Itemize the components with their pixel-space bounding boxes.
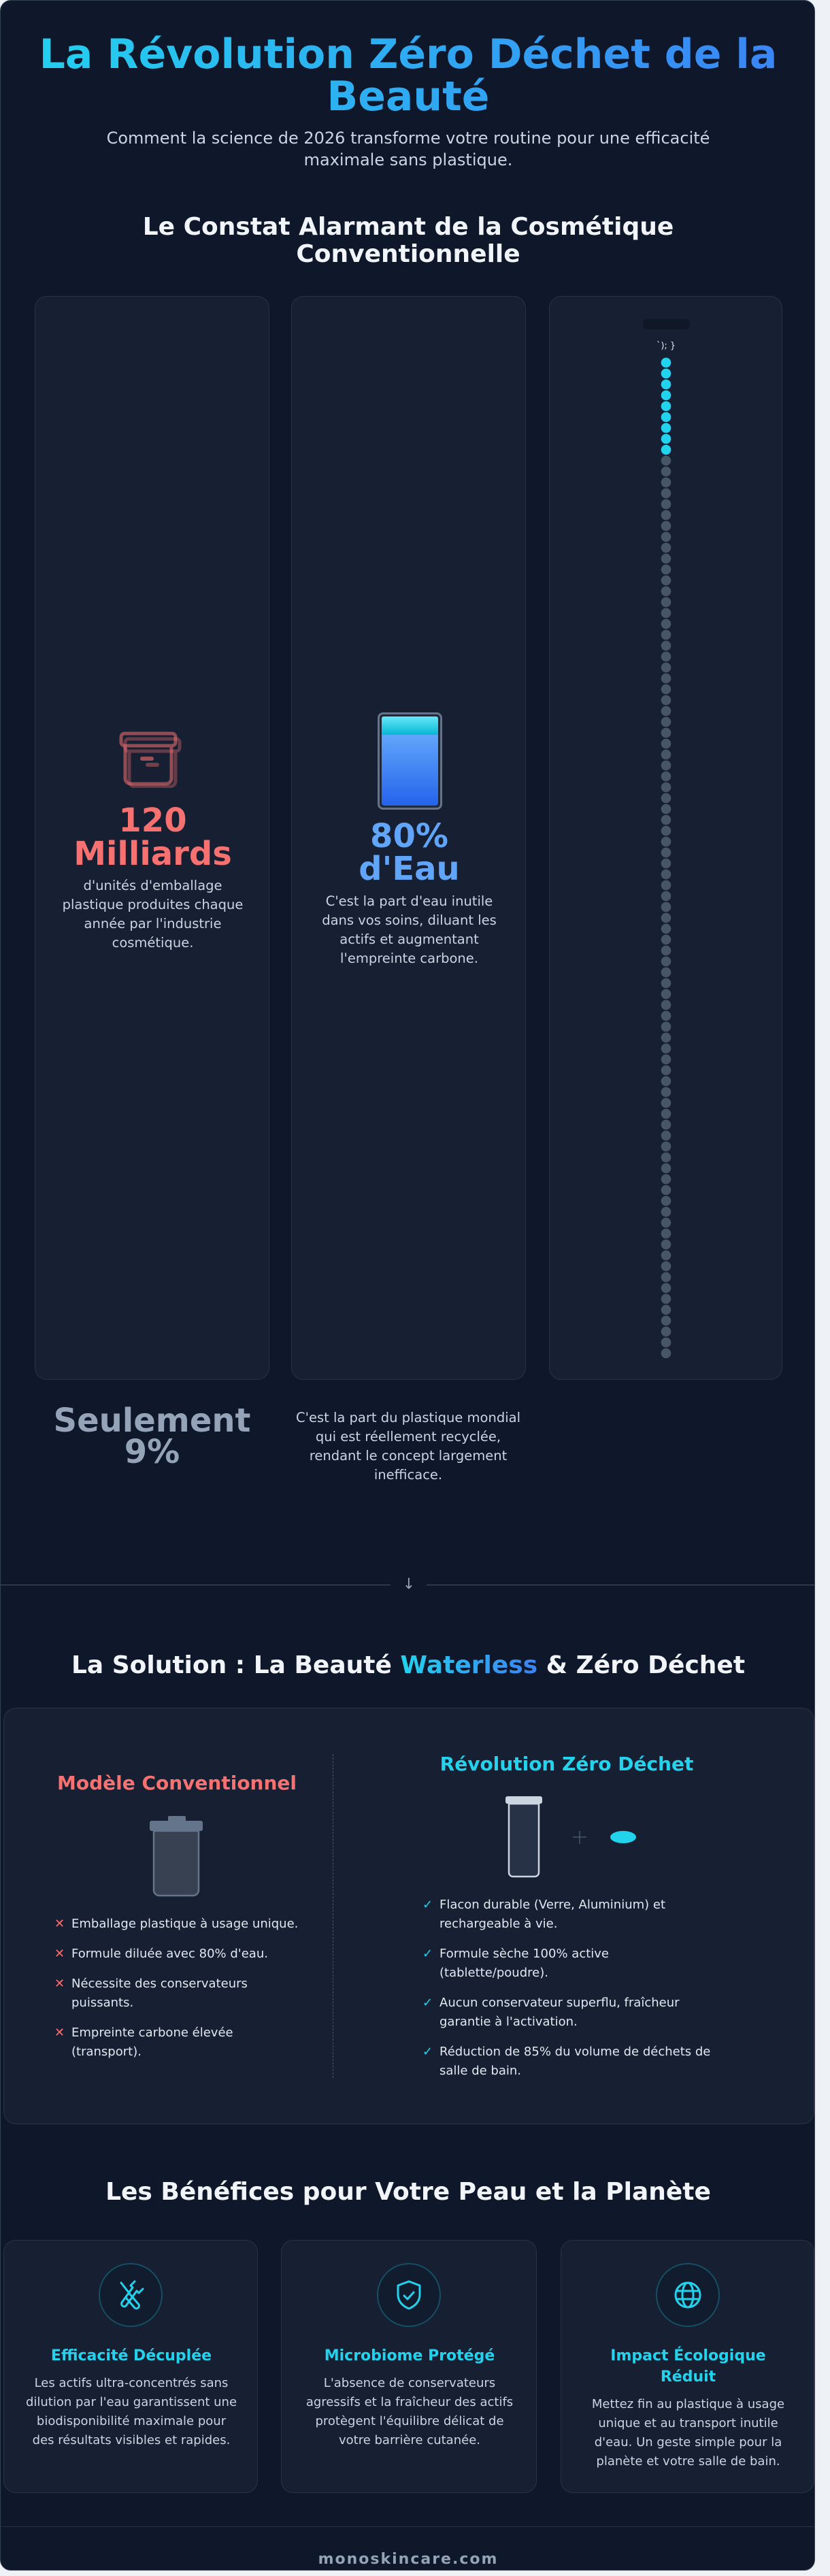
chart header box — [643, 319, 690, 329]
title: La Révolution Zéro Déchet de la — [39, 31, 777, 78]
footer divider — [1, 2526, 816, 2527]
heading: constat: Conventionnelle — [296, 240, 520, 268]
list: conventional drawbacks: ✕ — [54, 1977, 65, 1991]
panel: benefit ecology — [561, 2240, 814, 2493]
stat: 120 Milliards: Milliards — [73, 835, 232, 873]
list: zero waste benefits: Flacon durable (Verre, Aluminium) et rechargeable à vie. — [439, 1898, 665, 1931]
list: conventional drawbacks: ✕ — [54, 1917, 65, 1931]
stat: Seulement 9%: Seulement — [53, 1402, 250, 1440]
panel: benefit efficacy — [3, 2240, 258, 2493]
list: zero waste benefits: ✓ — [422, 1898, 433, 1912]
list: zero waste benefits: ✓ — [422, 2045, 433, 2059]
title: ecology: Impact Écologique — [610, 2347, 766, 2364]
list: conventional drawbacks: ✕ — [54, 1947, 65, 1961]
panel: benefit microbiome — [281, 2240, 537, 2493]
text: water description: C'est la part d'eau inutile dans vos soins, diluant les actifs et augmentant l'empreinte carbone. — [322, 893, 497, 966]
stat: Seulement 9% — [53, 1402, 250, 1471]
list: conventional drawbacks: Emballage plastique à usage unique. — [71, 1917, 298, 1931]
list: zero waste benefits: ✓ — [422, 1947, 433, 1961]
arrow divider: ↓ — [403, 1576, 415, 1593]
heading: solution: La Solution : La Beauté Waterless & Zéro Déchet — [71, 1651, 745, 1679]
panel: water stat — [291, 296, 526, 1380]
icon: shield — [377, 2263, 441, 2327]
subtitle — [107, 129, 710, 169]
list: conventional drawbacks — [54, 1917, 298, 2059]
text: efficacy: Les actifs ultra-concentrés sans dilution par l'eau garantissent une biodisponibilité maximale pour des résultats visibles et rapides. — [26, 2376, 237, 2447]
icon: water gauge — [378, 712, 442, 810]
list: zero waste benefits: Réduction de 85% du volume de déchets de salle de bain. — [439, 2045, 710, 2078]
list: conventional drawbacks: ✕ — [54, 2026, 65, 2040]
title — [1, 33, 816, 118]
list: conventional drawbacks: Formule diluée avec 80% d'eau. — [71, 1947, 268, 1961]
icon: refillable bottle plus tablet — [505, 1796, 636, 1878]
stat: Seulement 9%: 9% — [124, 1433, 180, 1471]
list: zero waste benefits — [422, 1898, 710, 2078]
subtitle: maximale sans plastique. — [304, 150, 512, 169]
list: conventional drawbacks: Nécessite des conservateurs puissants. — [71, 1977, 248, 2010]
list: conventional drawbacks: Empreinte carbone élevée (transport). — [71, 2026, 233, 2059]
text: microbiome: L'absence de conservateurs agressifs et la fraîcheur des actifs protègent l'équilibre délicat de votre barrière cutanée. — [306, 2376, 513, 2447]
title: ecology — [610, 2346, 766, 2385]
dots: recycled (cyan) — [661, 357, 671, 455]
heading: constat: Le Constat Alarmant de la Cosmétique — [143, 213, 674, 241]
text: recycling description: C'est la part du plastique mondial qui est réellement recyclée, rendant le concept largement inefficace. — [296, 1410, 520, 1483]
column: zero waste — [422, 1753, 710, 2078]
title: microbiome: Microbiome Protégé — [325, 2347, 495, 2364]
stray code text: `); } — [657, 341, 676, 351]
text: ecology: Mettez fin au plastique à usage unique et au transport inutile d'eau. Un geste simple pour la planète et votre salle de bain. — [592, 2397, 784, 2468]
subtitle: Comment la science de 2026 transforme votre routine pour une efficacité — [107, 129, 710, 148]
stat: 120 Milliards: 120 — [118, 802, 187, 840]
list: zero waste benefits: Aucun conservateur superflu, fraîcheur garantie à l'activation. — [439, 1996, 680, 2029]
list: zero waste benefits: ✓ — [422, 1996, 433, 2010]
icon: plastic bottle — [150, 1816, 203, 1897]
column: conventional model — [54, 1772, 298, 2059]
stat: 80% d'Eau: 80% — [370, 817, 448, 855]
title: Beauté — [327, 73, 490, 120]
stat: 80% d'Eau — [359, 817, 460, 888]
heading: conventional: Modèle Conventionnel — [57, 1772, 297, 1794]
icon: globe — [656, 2263, 720, 2327]
heading: constat — [143, 213, 674, 268]
footer: website: monoskincare.com — [318, 2551, 498, 2568]
stat: 120 Milliards — [73, 802, 232, 873]
title: efficacy: Efficacité Décuplée — [51, 2347, 212, 2364]
heading: zero waste: Révolution Zéro Déchet — [440, 1753, 693, 1775]
dots: not recycled (gray) — [661, 455, 671, 1359]
heading: benefits: Les Bénéfices pour Votre Peau et la Planète — [105, 2178, 711, 2206]
icon: tools — [99, 2263, 163, 2327]
stat: 80% d'Eau: d'Eau — [359, 850, 460, 888]
panel: recycling dots chart — [549, 296, 782, 1380]
text: packaging description: d'unités d'emballage plastique produites chaque année par l'industrie cosmétique. — [63, 878, 243, 951]
panel: plastic packaging stat — [35, 296, 269, 1380]
panel: comparison — [3, 1708, 814, 2124]
title: ecology: Réduit — [661, 2368, 716, 2385]
icon: packaging box — [120, 732, 181, 788]
list: zero waste benefits: Formule sèche 100% active (tablette/poudre). — [439, 1947, 609, 1980]
